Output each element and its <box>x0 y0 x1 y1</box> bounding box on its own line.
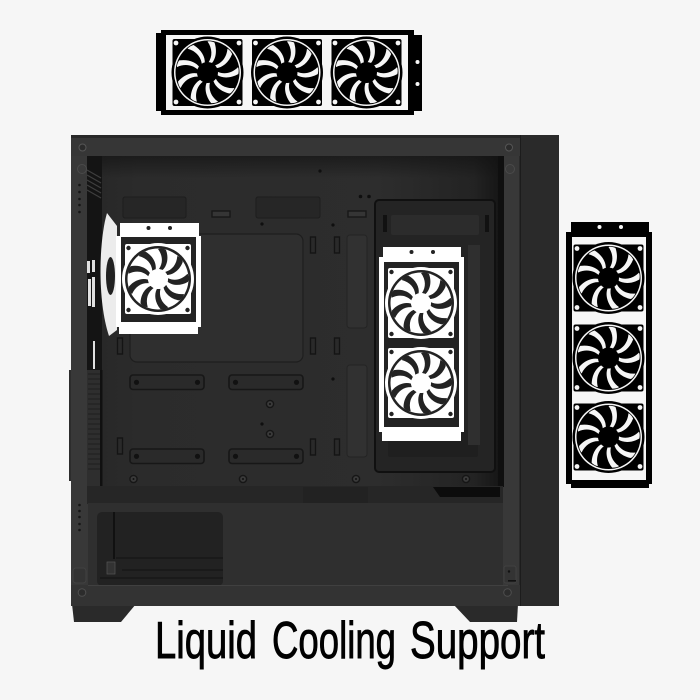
shelf above power supply shroud <box>87 486 503 504</box>
left white radiator bracket with fan <box>116 223 201 334</box>
case feet <box>72 604 518 622</box>
case left edge strip <box>69 370 73 481</box>
caption: Liquid <box>155 612 257 670</box>
small vertical slots <box>118 237 340 455</box>
cable rail slots <box>130 375 303 464</box>
right radiator with three fans <box>566 222 652 488</box>
caption: Cooling <box>272 612 396 670</box>
hole marks <box>260 169 371 426</box>
bottom band <box>71 566 520 606</box>
interior motherboard tray <box>87 156 504 487</box>
radiator bay panel <box>375 200 495 472</box>
large CPU cutout <box>130 234 303 362</box>
top band <box>71 135 520 174</box>
small tray slots <box>212 211 366 217</box>
top tray cutouts <box>123 197 320 218</box>
standoffs <box>130 400 470 483</box>
shroud cutout <box>97 512 223 586</box>
PC case <box>69 135 559 622</box>
case body frame <box>71 135 521 606</box>
caption <box>155 612 545 670</box>
power supply shroud <box>88 503 503 586</box>
caption: Support <box>410 612 545 670</box>
left vent stripes <box>87 170 101 469</box>
vertical long slots <box>347 235 367 457</box>
top radiator with three fans <box>156 30 422 115</box>
right white radiator bracket with two fans <box>379 247 464 441</box>
side fan seen edge-on <box>87 213 117 369</box>
right front panel <box>503 135 559 606</box>
dots on left rail <box>78 184 81 531</box>
